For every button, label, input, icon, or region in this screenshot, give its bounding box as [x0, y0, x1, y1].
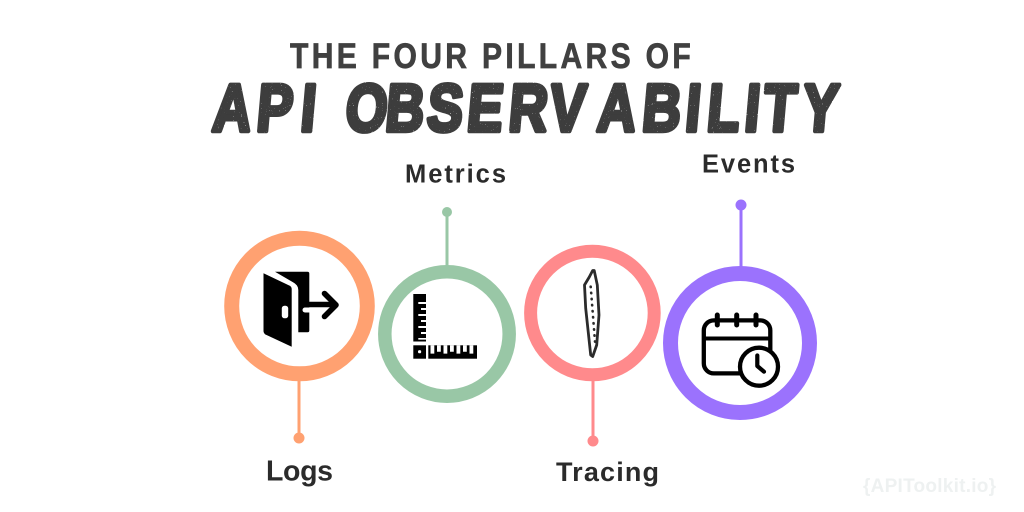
ring: metrics [385, 272, 509, 396]
connector: tracing [588, 380, 598, 446]
pillar: logs [232, 238, 367, 488]
label: metrics: Metrics [405, 160, 506, 188]
icon: knife blade [584, 270, 599, 356]
label: logs: Logs [266, 456, 333, 488]
label: events: Events [702, 150, 795, 178]
icon: calendar with clock [704, 315, 778, 386]
connector: logs [294, 380, 304, 444]
icon: door exit [264, 272, 336, 347]
title: API observability: API OBSERVABILITY [210, 70, 842, 145]
label: tracing: Tracing [556, 457, 659, 487]
ring: events [670, 274, 810, 412]
connector: metrics [442, 207, 452, 266]
watermark: {APIToolkit.io} [863, 476, 997, 497]
ring: logs [232, 238, 367, 374]
pillar: events [670, 150, 810, 412]
icon: set square ruler [413, 294, 477, 359]
pillar: metrics [385, 160, 509, 396]
ring: tracing [531, 251, 654, 375]
title: the four pillars of: THE FOUR PILLARS OF [290, 36, 691, 76]
pillar: tracing [531, 251, 659, 487]
connector: events [736, 200, 746, 267]
